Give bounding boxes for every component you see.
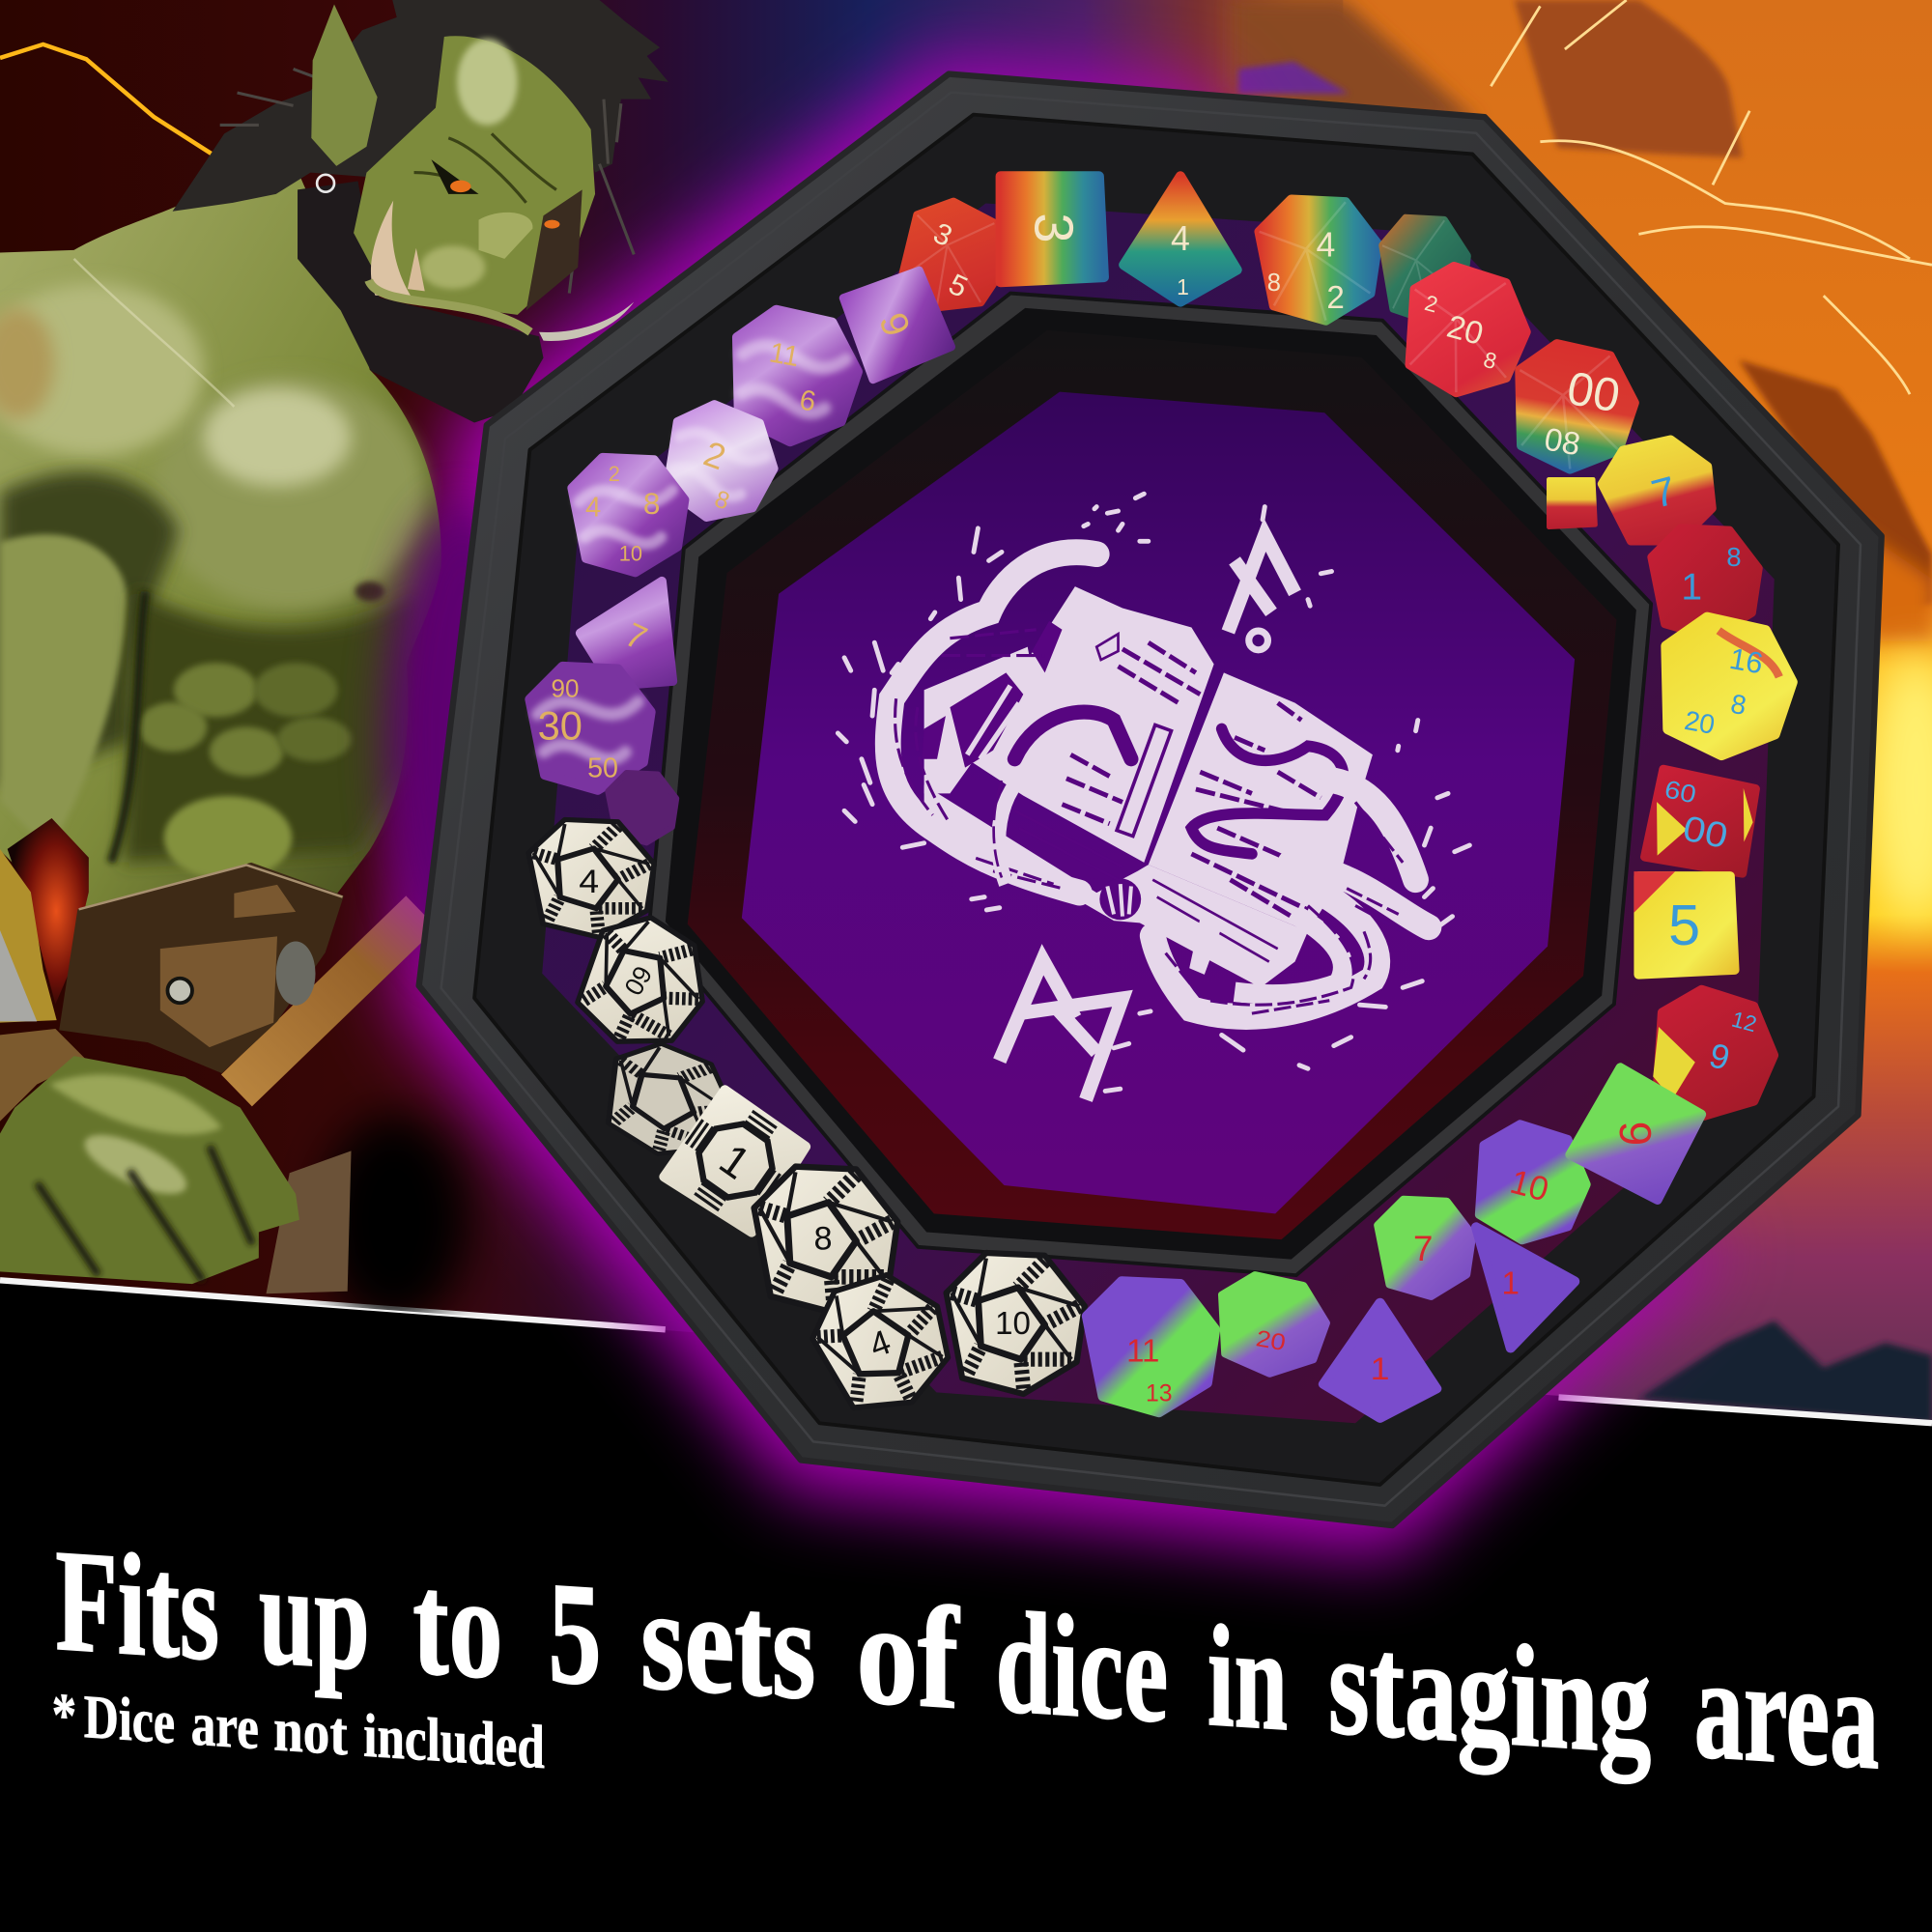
die: green-purple d20: 13: [1146, 1381, 1173, 1407]
flame mass behind left page: [924, 647, 1045, 793]
headline: staging: [1328, 1603, 1651, 1785]
footnote: included: [363, 1701, 545, 1781]
die: ivory d8: 4: [865, 1322, 895, 1365]
orc face: [354, 36, 595, 315]
die: purple d8: 2: [609, 462, 620, 486]
die: rainbow d4: 1: [1177, 274, 1189, 299]
orc hair: [173, 0, 668, 212]
die: ivory d20: [528, 819, 654, 937]
orc tusks: [371, 201, 634, 341]
dice set: purple marble: [530, 269, 952, 842]
die: lilac d10: 8: [711, 486, 733, 516]
rune top right: [1228, 535, 1295, 650]
die: orange-red d10: [886, 190, 1020, 326]
die: red d4: 1: [1681, 566, 1702, 608]
orc forehead light: [457, 39, 518, 125]
scattered flecks: [838, 494, 1469, 1091]
lilac fragments inside the windows: [967, 686, 1019, 759]
die: rainbow d6: [1001, 176, 1104, 282]
die: rainbow d6: 3: [1023, 213, 1084, 243]
die: red d4: [1652, 528, 1758, 637]
die: percentile rainbow: [1504, 338, 1642, 478]
die: purple d8: [572, 458, 685, 572]
right flame ring: [1152, 781, 1429, 1017]
dice set: ivory and black: [528, 819, 1085, 1427]
die: purple d4: 7: [619, 615, 652, 658]
die: purple triangle d4: [1476, 1227, 1575, 1348]
die: purple d12: 6: [797, 384, 818, 418]
die: green-purple d10: 10: [1506, 1163, 1552, 1208]
die: ivory d12: 8: [814, 1220, 833, 1257]
headline: sets: [640, 1557, 815, 1730]
right book page: [1149, 672, 1373, 931]
die: red d12: [1639, 981, 1785, 1129]
die: percentile rainbow: 08: [1542, 421, 1583, 463]
die: purple d4: [566, 559, 709, 708]
die: orange-red d10: 3: [928, 217, 956, 253]
felt emblem: burning spellbook and runes: [838, 494, 1469, 1099]
orc ear: [311, 4, 378, 166]
die: rainbow d4: 4: [1171, 219, 1190, 258]
orc cheek shading and wrinkles: [414, 133, 582, 310]
die: ivory d6 one: 1: [711, 1133, 760, 1189]
headline: in: [1208, 1595, 1288, 1761]
orc muscle shading: [0, 259, 425, 880]
die: purple percentile: 50: [587, 753, 618, 784]
die: yellow d20: 16: [1727, 641, 1766, 680]
edge fade of orc into glow: [359, 487, 475, 962]
footnote: Dice: [84, 1682, 175, 1756]
die: yellow-red d10: 7: [1647, 468, 1681, 517]
page text dashes: [1062, 642, 1321, 919]
headline: dice: [996, 1580, 1168, 1753]
die: yellow-red d10: [1595, 430, 1724, 556]
felt playing surface: [742, 392, 1575, 1213]
die: ivory d4: [558, 900, 725, 1068]
axe handle: [237, 912, 421, 1091]
die: ivory d20: 4: [579, 863, 599, 900]
headline: 5: [549, 1551, 601, 1717]
dice tray: outer leather octagon: [419, 74, 1882, 1525]
headline: to: [412, 1543, 502, 1710]
die: green d12: [1382, 218, 1467, 321]
gap with fire under arm: [8, 818, 89, 1005]
die: rainbow d8: 2: [1326, 280, 1345, 316]
purple windows in the left flame mass: [922, 621, 1062, 768]
die: purple d8: 4: [585, 492, 601, 523]
die: rainbow d8: 8: [1267, 270, 1281, 297]
black lower band: [0, 1282, 1932, 1932]
die: purple d6: 9: [870, 307, 918, 342]
die: purple d4: [1323, 1302, 1436, 1418]
die: red d20: 20: [1443, 309, 1487, 353]
die: green-purple d6: [1570, 1067, 1705, 1204]
dice set: rainbow and red: [886, 176, 1801, 1129]
die: small purple: [608, 773, 676, 842]
die: red d12: 9: [1705, 1036, 1734, 1078]
headline: of: [856, 1572, 960, 1740]
orc head: [173, 0, 668, 423]
die: green-purple d12: 20: [1254, 1326, 1288, 1356]
orc eye: [431, 159, 559, 229]
die: red d12: 12: [1729, 1007, 1759, 1037]
die: purple d8: 8: [643, 486, 660, 521]
die: red-yellow percentile: [1645, 769, 1760, 878]
orc torso: [0, 166, 441, 924]
die: ivory d10: 10: [995, 1306, 1031, 1342]
footnote: are: [191, 1690, 259, 1762]
die: lilac d10: [650, 394, 787, 533]
footnote: not: [273, 1694, 348, 1768]
die: red-yellow percentile: 60: [1662, 775, 1698, 809]
orc lip: [369, 280, 530, 332]
die: purple percentile: 90: [552, 673, 579, 702]
die: green-purple d20: 11: [1126, 1333, 1159, 1369]
die: orange-red d10: 5: [944, 269, 972, 304]
die: purple d4: 1: [1371, 1351, 1389, 1387]
die: yellow d6: 5: [1668, 893, 1700, 957]
footnote: [52, 1680, 545, 1781]
headline: up: [259, 1532, 370, 1701]
die: rainbow d4: [1123, 176, 1237, 301]
die: red d20: 2: [1422, 290, 1440, 318]
white diagonal divider: [0, 1280, 1932, 1423]
die: green-purple d10: [1463, 1117, 1597, 1252]
die: purple d12: [722, 304, 866, 451]
ear ring: [317, 175, 334, 192]
die: purple d8: 10: [619, 541, 642, 565]
die: red d20: 8: [1481, 347, 1499, 374]
die: ivory d12: [754, 1167, 897, 1313]
die: ivory d10: [947, 1253, 1085, 1394]
die: ivory d6 one: [662, 1089, 810, 1236]
die: red d4: 8: [1726, 542, 1742, 572]
die: rainbow d8: [1260, 200, 1378, 321]
headline: [55, 1520, 1879, 1800]
orc snout: [479, 213, 532, 259]
fur skirt: [267, 1151, 352, 1293]
left book page: [967, 586, 1214, 863]
die: yellow d6: [1634, 871, 1735, 975]
die: red d20: [1392, 259, 1537, 406]
orc warrior illustration: [0, 0, 668, 1293]
orc belt: [59, 863, 344, 1073]
dice set: green and purple: [1087, 1067, 1705, 1418]
die: purple percentile: 30: [538, 703, 582, 749]
die: yellow d20: 8: [1728, 689, 1748, 721]
dragon silhouettes: [1014, 634, 1344, 854]
die: small yellow-red: [1548, 479, 1596, 527]
orc beard: [298, 182, 544, 423]
orc hand: [0, 1056, 299, 1284]
die: rainbow d8: 4: [1317, 225, 1335, 264]
purple glow behind tray: [394, 55, 1725, 1559]
background: stormy sky: [0, 0, 1932, 1430]
yellow cloth and axe blade: [0, 849, 57, 1023]
hair strands: [220, 69, 634, 294]
footnote: *: [52, 1680, 76, 1749]
die: ivory d8: [800, 1260, 965, 1427]
headline: Fits: [55, 1520, 219, 1691]
inner removable tray: [649, 294, 1651, 1275]
die: percentile rainbow: 00: [1563, 362, 1624, 422]
die: purple percentile: [530, 667, 650, 790]
die: yellow d20: [1649, 611, 1801, 765]
lightning bolt: [0, 44, 212, 154]
left flame ring: [888, 553, 1096, 893]
book edges and spine: [924, 784, 1308, 987]
leather strap at hip: [0, 1029, 86, 1122]
die: green-purple d20: [1087, 1282, 1215, 1412]
die: green-purple d6: 9: [1610, 1122, 1661, 1146]
die: purple d6: [843, 269, 952, 380]
die: green-purple d12: [1210, 1270, 1332, 1381]
die: dark ivory d6: [590, 1031, 747, 1173]
die: green d6: 7: [1413, 1229, 1433, 1268]
rune bottom left: [1000, 959, 1122, 1099]
dark shadow below the orc arm: [321, 1115, 469, 1324]
die: ivory d4: 60: [618, 961, 658, 1000]
die: green d6: [1378, 1200, 1472, 1296]
die: red-yellow percentile: 00: [1680, 809, 1731, 857]
die: yellow d20: 20: [1682, 705, 1718, 740]
die: purple triangle d4: 1: [1502, 1265, 1520, 1301]
die: lilac d10: 2: [698, 434, 731, 477]
die: purple d12: 11: [767, 336, 802, 373]
